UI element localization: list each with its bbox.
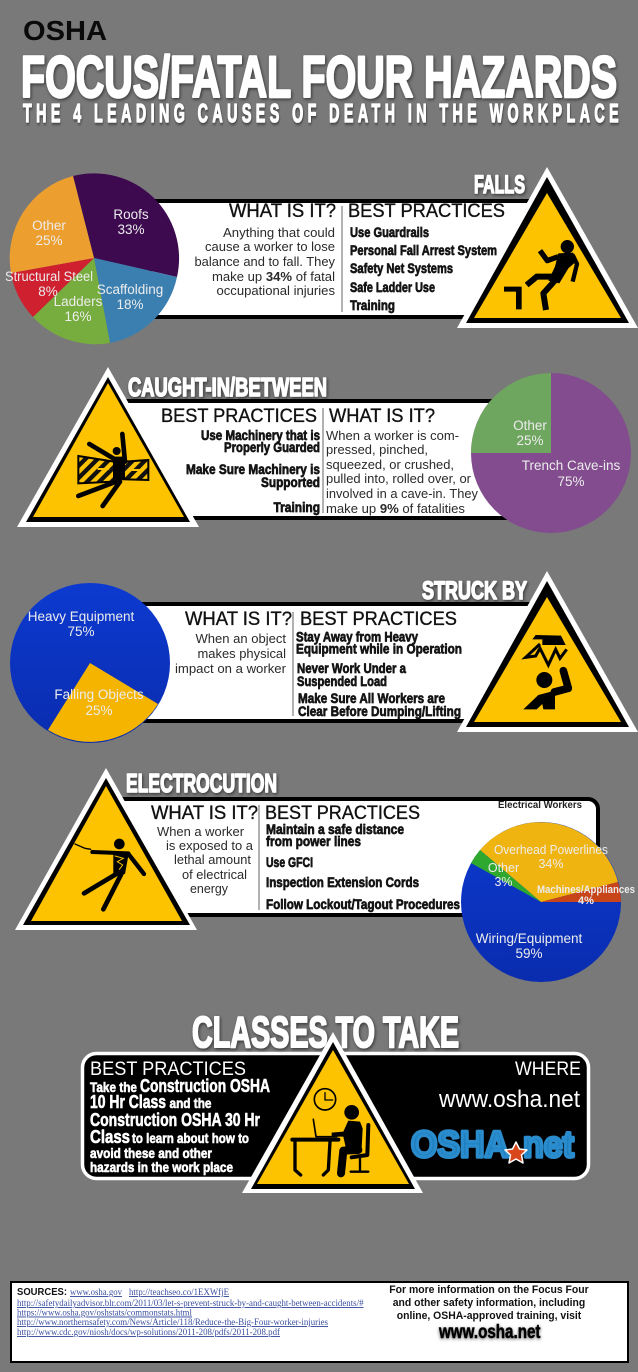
falls description: make up 34% of fatal xyxy=(212,269,335,284)
falls description: cause a worker to lose xyxy=(205,239,335,254)
caught best practices list: Use Machinery that is xyxy=(201,427,320,443)
struck pie chart: 25% xyxy=(85,703,113,718)
struck description: impact on a worker xyxy=(175,661,287,676)
electrocution description: is exposed to a xyxy=(166,838,254,853)
sources list: http://safetydailyadvisor.blr.com/2011/03/let-s-prevent-struck-by-and-caught-between-accidents/# xyxy=(17,1298,364,1309)
panel: electrocution xyxy=(15,768,635,982)
caught what is it heading: WHAT IS IT? xyxy=(329,406,435,427)
electrocution pie chart: 4% xyxy=(578,895,594,907)
falls pie chart: Structural Steel xyxy=(5,269,93,284)
struck pie chart: Falling Objects xyxy=(54,687,144,702)
caught pie chart: 25% xyxy=(516,433,544,448)
electrocution best practices list: from power lines xyxy=(266,833,361,849)
caught best practices list: Properly Guarded xyxy=(224,439,320,455)
sources list: www.osha.gov xyxy=(70,1288,122,1298)
electrocution pie chart: 59% xyxy=(515,946,543,961)
struck best practices list xyxy=(296,628,462,719)
electrocution best practices list: Use GFCI xyxy=(266,854,313,870)
classes best practices heading: BEST PRACTICES xyxy=(90,1059,246,1080)
falls what is it heading: WHAT IS IT? xyxy=(229,201,336,222)
electrocution pie chart: 3% xyxy=(494,875,513,889)
electrocution best practices list: Inspection Extension Cords xyxy=(266,874,419,890)
falls description: occupational injuries xyxy=(216,283,335,298)
classes url: www.osha.net xyxy=(438,1086,580,1113)
struck pie chart xyxy=(10,583,170,743)
falls pie chart: 18% xyxy=(116,297,144,312)
electrocution text band xyxy=(110,799,598,915)
falls best practices list xyxy=(350,224,497,313)
classes description: Take the xyxy=(90,1079,137,1095)
caught description: squeezed, or crushed, xyxy=(326,457,454,472)
falls best practices list: Training xyxy=(350,297,395,313)
struck what is it heading: WHAT IS IT? xyxy=(185,609,292,630)
label: OSHA: OSHA xyxy=(23,15,107,46)
caught pie chart xyxy=(471,373,631,533)
falls pie chart xyxy=(5,173,179,344)
electrocution best practices list xyxy=(266,821,460,912)
caught best practices list: Supported xyxy=(261,474,320,490)
struck description: makes physical xyxy=(198,646,286,661)
classes where heading: WHERE xyxy=(515,1059,581,1080)
caught pie chart: 75% xyxy=(557,474,585,489)
caught pie chart: Other xyxy=(513,418,547,433)
struck pie chart: 75% xyxy=(67,624,95,639)
panel: classes to take xyxy=(82,1008,588,1193)
classes description: to learn about how to xyxy=(132,1130,249,1146)
caught description: When a worker is com- xyxy=(326,428,459,443)
struck best practices list: Equipment while in Operation xyxy=(296,640,462,656)
falls heading: FALLS xyxy=(474,171,525,199)
falls pie chart: Other xyxy=(32,218,66,233)
electrocution heading: ELECTROCUTION xyxy=(126,768,277,798)
electrocution description: energy xyxy=(190,881,228,896)
caught best practices list: Training xyxy=(274,499,320,515)
logo: OSHA.net xyxy=(411,1124,574,1165)
footer box xyxy=(11,1282,628,1362)
electrocution description: When a worker xyxy=(157,824,245,839)
classes description: hazards in the work place xyxy=(90,1159,233,1175)
struck heading: STRUCK BY xyxy=(422,577,527,605)
panel: struck by xyxy=(10,571,638,743)
caught description: involved in a cave-in. They xyxy=(326,486,478,501)
electrocution description: of electrical xyxy=(182,867,247,882)
panel: falls xyxy=(5,167,638,344)
struck text band xyxy=(120,604,545,721)
classes description: Construction OSHA xyxy=(140,1076,270,1096)
classes description: avoid these and other xyxy=(90,1145,212,1161)
more information text: For more information on the Focus Four xyxy=(389,1284,589,1296)
falls pie chart: 25% xyxy=(35,233,63,248)
logo: OSHA.net: net xyxy=(523,1124,574,1165)
falls description: balance and to fall. They xyxy=(194,254,335,269)
more information text xyxy=(389,1284,589,1322)
caught best practices list xyxy=(186,427,320,515)
panel: caught-in/between xyxy=(17,367,631,533)
sources list: http://www.cdc.gov/niosh/docs/wp-solutions/2011-208/pdfs/2011-208.pdf xyxy=(17,1327,281,1338)
sources list: SOURCES: xyxy=(17,1287,67,1298)
footer url: www.osha.net xyxy=(438,1322,541,1343)
classes description: 10 Hr Class xyxy=(90,1092,166,1112)
caught text band xyxy=(120,401,515,518)
electrocution pie chart: Overhead Powerlines xyxy=(494,843,608,857)
classes description: Class xyxy=(90,1127,130,1147)
electrocution best practices list: Follow Lockout/Tagout Procedures xyxy=(266,896,460,912)
caught description: pulled into, rolled over, or xyxy=(326,471,472,486)
electrocution pie chart: 34% xyxy=(538,857,564,871)
more information text: online, OSHA-approved training, visit xyxy=(397,1310,582,1322)
caught best practices list: Make Sure Machinery is xyxy=(186,461,320,477)
caught description xyxy=(326,428,478,516)
electrocution pie chart: Wiring/Equipment xyxy=(476,931,583,946)
sources list: http://teachseo.co/1EXWfjE xyxy=(129,1287,229,1298)
struck description xyxy=(175,631,287,676)
falls best practices list: Personal Fall Arrest System xyxy=(350,242,497,258)
falls pie chart: 16% xyxy=(64,309,92,324)
struck description: When an object xyxy=(196,631,286,646)
falls description xyxy=(194,225,335,298)
icon: falls warning triangle xyxy=(457,167,638,328)
falls pie chart: 8% xyxy=(38,284,58,299)
struck best practices list: Make Sure All Workers are xyxy=(298,690,445,706)
struck best practices list: Never Work Under a xyxy=(297,660,406,676)
classes description: Construction OSHA 30 Hr xyxy=(90,1110,260,1130)
falls pie chart: 33% xyxy=(117,222,145,237)
more information text: and other safety information, including xyxy=(393,1297,585,1309)
classes heading: CLASSES TO TAKE xyxy=(192,1008,459,1057)
sources list: http://www.northernsafety.com/News/Article/118/Reduce-the-Big-Four-worker-injuries xyxy=(17,1317,328,1328)
falls best practices list: Safety Net Systems xyxy=(350,260,453,276)
classes description: and the xyxy=(170,1095,212,1111)
icon: caught warning triangle xyxy=(17,367,199,527)
caught best practices heading: BEST PRACTICES xyxy=(161,406,317,427)
struck best practices list: Clear Before Dumping/Lifting xyxy=(298,703,461,719)
caught heading: CAUGHT-IN/BETWEEN xyxy=(128,372,327,402)
falls description: Anything that could xyxy=(223,225,335,240)
subtitle: THE 4 LEADING CAUSES OF DEATH IN THE WORKPLACE xyxy=(23,100,619,128)
struck best practices list: Stay Away from Heavy xyxy=(296,628,418,644)
sources list xyxy=(17,1287,364,1338)
classes black panel xyxy=(82,1054,588,1178)
icon: classes warning triangle xyxy=(242,1032,423,1193)
falls pie chart: Ladders xyxy=(54,294,103,309)
falls text band xyxy=(150,201,545,317)
electrocution pie chart: Other xyxy=(488,861,519,875)
falls best practices heading: BEST PRACTICES xyxy=(348,201,505,222)
struck pie chart: Heavy Equipment xyxy=(28,609,135,624)
logo: OSHA.net: OSHA xyxy=(411,1124,509,1165)
sources list: https://www.osha.gov/oshstats/commonstats.html xyxy=(17,1308,192,1318)
caught pie chart: Trench Cave-ins xyxy=(522,458,621,473)
panel: sources and more information xyxy=(11,1282,628,1362)
electrocution what is it heading: WHAT IS IT? xyxy=(151,803,258,824)
electrocution description xyxy=(157,824,254,896)
electrocution best practices heading: BEST PRACTICES xyxy=(265,803,420,824)
electrocution pie chart xyxy=(461,822,635,982)
falls best practices list: Use Guardrails xyxy=(350,224,429,240)
falls pie chart: Roofs xyxy=(113,207,149,222)
classes description xyxy=(90,1076,270,1175)
caught description: pressed, pinched, xyxy=(326,442,428,457)
icon: electrocution warning triangle xyxy=(15,768,197,930)
electrocution chart title: Electrical Workers xyxy=(498,800,582,811)
falls best practices list: Safe Ladder Use xyxy=(350,279,435,295)
falls pie chart: Scaffolding xyxy=(97,282,163,297)
struck best practices list: Suspended Load xyxy=(297,673,387,689)
electrocution description: lethal amount xyxy=(174,852,251,867)
caught description: make up 9% of fatalities xyxy=(326,501,465,516)
electrocution best practices list: Maintain a safe distance xyxy=(266,821,404,837)
icon: struck warning triangle xyxy=(457,571,638,732)
struck best practices heading: BEST PRACTICES xyxy=(300,609,457,630)
